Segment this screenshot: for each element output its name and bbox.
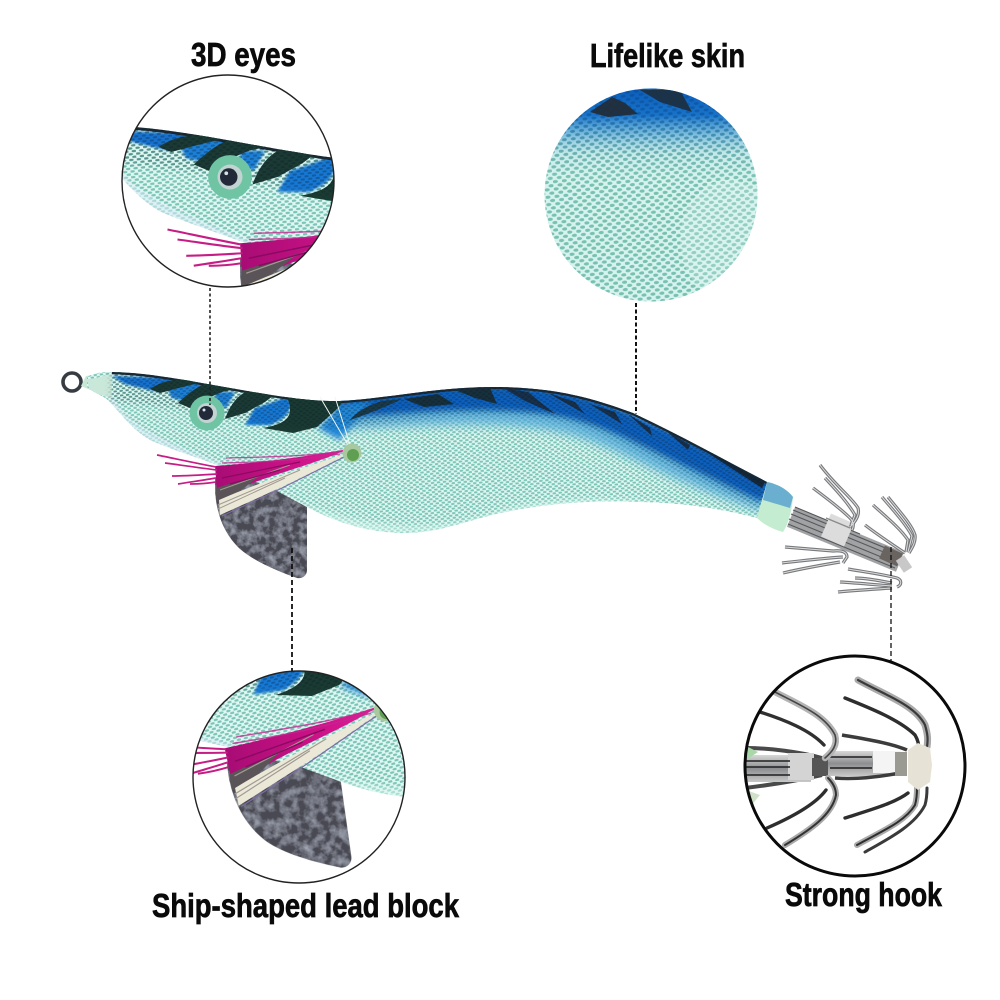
icon: white bead — [908, 743, 932, 790]
panel: 3D eyes detail circle — [121, 74, 335, 288]
panel: lifelike skin detail circle — [544, 88, 758, 302]
panel: lead block detail circle — [192, 670, 406, 884]
main squid jig lure — [63, 350, 915, 592]
title: Lifelike skin: Lifelike skin — [590, 37, 745, 74]
dotted leader: lead block — [291, 548, 293, 671]
title: 3D eyes: 3D eyes — [191, 36, 296, 73]
title: Ship-shaped lead block: Ship-shaped lead block — [152, 887, 460, 924]
dotted leader: eyes — [209, 288, 211, 405]
icon: hook sleeves — [745, 735, 907, 788]
dotted leader: hook — [890, 547, 892, 666]
infographic canvas — [61, 42, 966, 924]
title: Strong hook: Strong hook — [785, 876, 943, 913]
dotted leader: skin — [635, 303, 637, 414]
icon: hook barbs — [760, 680, 928, 852]
panel: strong hook detail circle — [745, 656, 965, 876]
